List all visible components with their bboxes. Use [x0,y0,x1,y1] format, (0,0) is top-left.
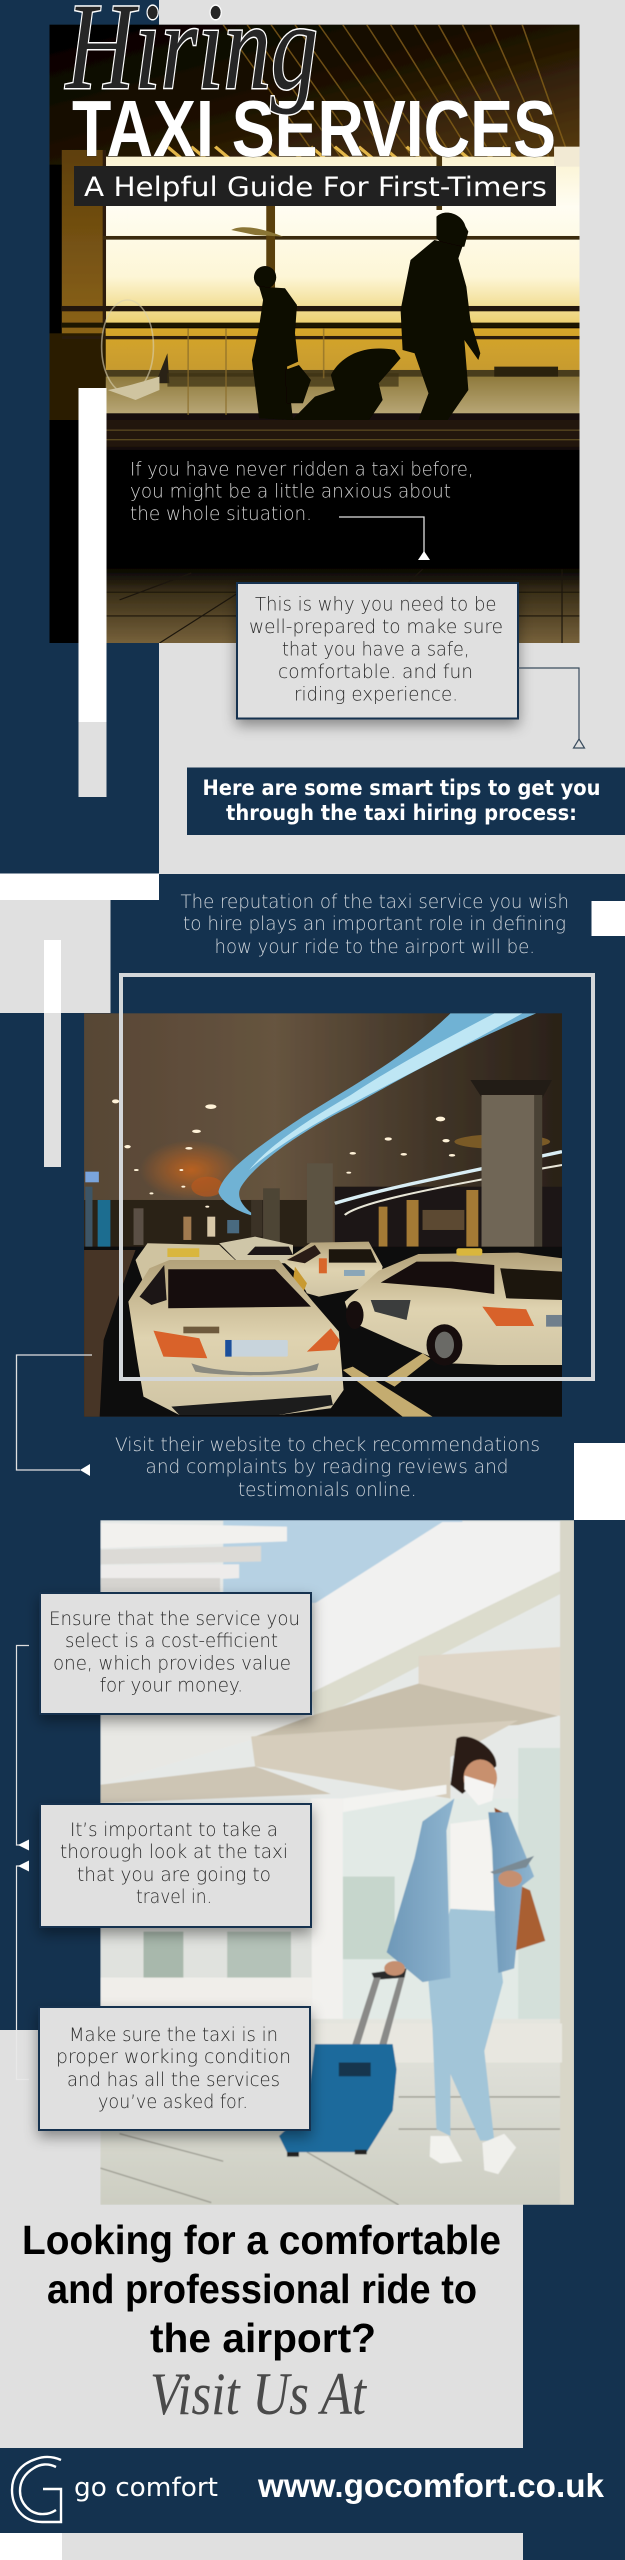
woman [384,1736,545,2174]
callout: look at the taxi: travel in. [136,1887,212,1908]
callout: look at the taxi: that you are going to [77,1865,271,1886]
callout: be well prepared: riding experience. [294,684,458,706]
text: website recommendations: testimonials online. [238,1480,416,1501]
callout: working condition: you’ve asked for. [98,2092,248,2113]
decorative: white strip under navy block [0,874,159,900]
photo: airport taxi rank at night [84,1013,562,1417]
heading: call to action: the airport? [150,2315,376,2361]
text: website recommendations [115,1435,540,1501]
photo: airport travellers at sunset [49,24,580,644]
callout: be well prepared: This is why you need to be [255,594,496,616]
right taxi [345,1253,562,1365]
arrow: photo to website text [16,1355,92,1476]
heading: call to action: Looking for a comfortable [22,2217,501,2263]
subtitle banner: A Helpful Guide For First-Timers [84,172,547,203]
decorative: bottom strip [0,2533,523,2560]
connector: bracket for tips one and two [16,1646,29,1850]
back taxis [136,1243,235,1283]
text: intro paragraph [130,460,474,525]
callout: cost-efficient: select is a cost-efficient [65,1631,278,1652]
callout: working condition: proper working condition [56,2047,291,2068]
callout: be well prepared: comfortable. and fun [278,662,473,683]
decorative: outline frame over taxi photo [121,975,593,1379]
connector: bracket for tips three and two [16,1860,29,2080]
main taxi [128,1260,344,1415]
callout: working condition: Make sure the taxi is in [69,2025,278,2046]
background: navy top-left block [0,0,159,874]
heading: call to action [22,2217,501,2361]
text: reputation paragraph: how your ride to the airport will be. [214,937,535,958]
decorative bar: white and grey vertical [78,388,106,797]
script: Visit Us At: Visit Us At [150,2361,367,2427]
callout: look at the taxi: thorough look at the taxi [60,1842,288,1863]
blue curved light strip [218,1013,536,1217]
callout: cost-efficient: for your money. [100,1676,243,1696]
banner: smart tips heading [187,768,625,835]
text: intro paragraph: If you have never ridden a taxi before, [130,460,474,480]
text: intro paragraph: you might be a little anxious about [130,482,451,503]
logo wordmark: go comfort [74,2473,218,2503]
background: light grey top area [159,0,625,874]
text: reputation paragraph [180,892,569,958]
photo: woman with suitcase at airport [100,1520,574,2205]
callout: cost-efficient: one, which provides value [53,1653,291,1674]
heading: call to action: and professional ride to [47,2266,477,2312]
website url: www.gocomfort.co.uk [257,2467,605,2504]
callout: working condition [39,2007,310,2130]
background: navy right column [523,2030,625,2560]
callout: be well prepared: well-prepared to make sure [249,617,503,638]
icon: traveller silhouettes [252,213,480,433]
suitcase [279,1968,407,2157]
icon: go comfort logo mark [12,2457,61,2522]
callout: cost-efficient [40,1593,311,1714]
decorative: white block right [592,901,625,936]
callout: working condition: and has all the services [67,2070,280,2091]
text: website recommendations: Visit their website to check recommendations [115,1435,540,1456]
background: lower grey area [0,2030,523,2448]
text: intro paragraph: the whole situation. [130,504,312,525]
banner: smart tips heading: Here are some smart tips to get you [202,776,600,800]
text: reputation paragraph: The reputation of the taxi service you wish [180,892,569,913]
decorative: grey block left [0,900,110,1013]
text: website recommendations: and complaints by reading reviews and [146,1457,508,1478]
callout: be well prepared: that you have a safe, [282,640,470,660]
decorative: vertical bar left [44,940,61,1167]
subtitle banner [74,166,556,206]
arrow: intro to box [339,517,430,560]
text: reputation paragraph: to hire plays an important role in defining [183,914,566,935]
callout: look at the taxi: It’s important to take a [70,1820,278,1841]
banner: smart tips heading: through the taxi hiring process: [226,801,577,825]
decorative: white block right [574,1443,625,1520]
footer band [0,2448,625,2533]
callout: cost-efficient: Ensure that the service you [49,1609,300,1630]
background: navy middle section [0,874,625,2030]
callout: be well prepared [237,583,518,718]
arrow: callout to tips banner [518,668,584,748]
callout: look at the taxi [40,1804,311,1927]
